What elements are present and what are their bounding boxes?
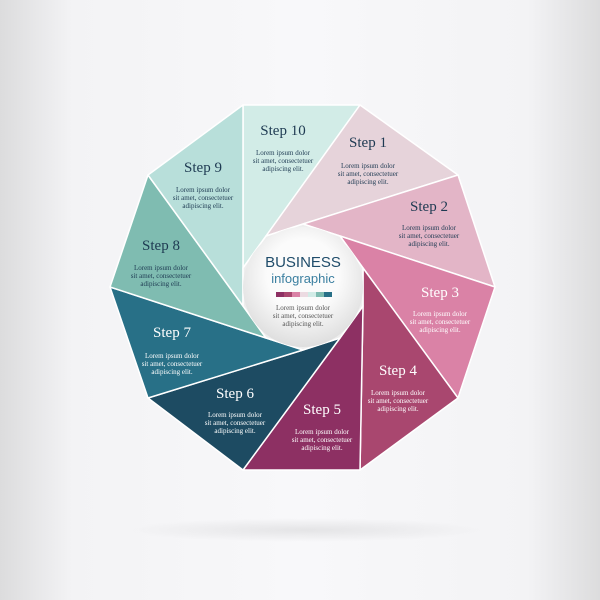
segment: step 6 xyxy=(148,338,340,470)
text: step 10: Lorem ipsum dolor xyxy=(256,149,311,157)
segment: step 10 xyxy=(243,105,360,268)
text: step 1: Lorem ipsum dolor xyxy=(341,162,396,170)
text: step 7 xyxy=(142,325,203,376)
text: step 6: Lorem ipsum dolor xyxy=(208,411,263,419)
segment: step 4 xyxy=(360,268,458,470)
text: step 1: adipiscing elit. xyxy=(347,178,389,186)
text: step 2: Lorem ipsum dolor xyxy=(402,224,457,232)
center title: BUSINESS xyxy=(265,254,341,271)
center text: sit amet, consectetuer xyxy=(273,312,334,320)
text: step 1 xyxy=(338,135,399,186)
center circle xyxy=(243,224,363,350)
segment: step 5 xyxy=(243,306,363,470)
text: step 4: Step 4 xyxy=(379,363,417,379)
text: step 9: Step 9 xyxy=(184,160,222,176)
text: step 7: Lorem ipsum dolor xyxy=(145,352,200,360)
text: step 5: sit amet, consectetuer xyxy=(292,436,353,444)
text: step 8: Step 8 xyxy=(142,238,180,254)
segment: step 1 xyxy=(266,105,458,236)
segment: step 8 xyxy=(110,175,266,338)
text: step 2: sit amet, consectetuer xyxy=(399,232,460,240)
center text: Lorem ipsum dolor xyxy=(276,304,331,312)
text: step 7: Step 7 xyxy=(153,325,191,341)
text: step 9: Lorem ipsum dolor xyxy=(176,186,231,194)
text: step 8: Lorem ipsum dolor xyxy=(134,264,189,272)
text: step 6: Step 6 xyxy=(216,386,254,402)
text: step 9 xyxy=(173,160,234,210)
text: step 5: adipiscing elit. xyxy=(301,444,343,452)
text: step 10: sit amet, consectetuer xyxy=(253,157,314,165)
text: step 2 xyxy=(399,199,460,248)
text: step 7: adipiscing elit. xyxy=(151,368,193,376)
decagon wheel xyxy=(110,105,495,470)
text: step 8 xyxy=(131,238,192,288)
shadow xyxy=(125,518,485,542)
text: step 8: sit amet, consectetuer xyxy=(131,272,192,280)
text: step 3: adipiscing elit. xyxy=(419,326,461,334)
text: step 3: Lorem ipsum dolor xyxy=(413,310,468,318)
segment: step 7 xyxy=(110,287,303,398)
color bar xyxy=(276,292,332,297)
text: step 6: sit amet, consectetuer xyxy=(205,419,266,427)
text: step 1: Step 1 xyxy=(349,135,387,151)
text: step 3: Step 3 xyxy=(421,285,459,301)
text: step 10 xyxy=(253,123,314,173)
text: step 6: adipiscing elit. xyxy=(214,427,256,435)
segment: step 2 xyxy=(303,175,495,287)
text: step 2: Step 2 xyxy=(410,199,448,215)
text: step 7: sit amet, consectetuer xyxy=(142,360,203,368)
center circle: infographic xyxy=(271,271,335,286)
text: step 4 xyxy=(368,363,429,413)
text: step 8: adipiscing elit. xyxy=(140,280,182,288)
text: step 6 xyxy=(205,386,266,435)
text: step 10: Step 10 xyxy=(260,123,306,139)
text: step 3: sit amet, consectetuer xyxy=(410,318,471,326)
text: step 9: adipiscing elit. xyxy=(182,202,224,210)
text: step 4: Lorem ipsum dolor xyxy=(371,389,426,397)
text: step 5 xyxy=(292,402,353,452)
text: step 5: Step 5 xyxy=(303,402,341,418)
text: step 2: adipiscing elit. xyxy=(408,240,450,248)
text: step 3 xyxy=(410,285,471,334)
center text: adipiscing elit. xyxy=(282,320,324,328)
text: step 10: adipiscing elit. xyxy=(262,165,304,173)
text: step 5: Lorem ipsum dolor xyxy=(295,428,350,436)
segment: step 9 xyxy=(148,105,243,306)
text: step 9: sit amet, consectetuer xyxy=(173,194,234,202)
text: step 4: sit amet, consectetuer xyxy=(368,397,429,405)
segment: step 3 xyxy=(340,236,495,398)
text: step 1: sit amet, consectetuer xyxy=(338,170,399,178)
text: step 4: adipiscing elit. xyxy=(377,405,419,413)
